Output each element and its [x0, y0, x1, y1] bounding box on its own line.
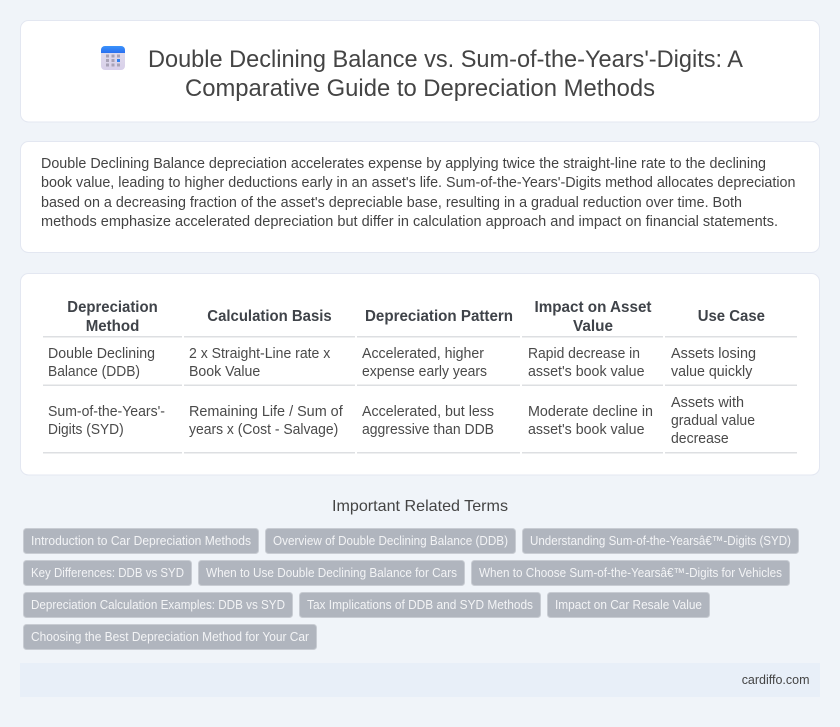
table rules — [43, 337, 797, 453]
table row: DDB — [48, 346, 756, 380]
icon: calendar — [101, 46, 125, 70]
table header: Value — [573, 318, 613, 335]
table header: Impact on Asset — [534, 299, 652, 316]
related term tags: Depreciation Calculation Examples: DDB vs SYD — [31, 598, 285, 612]
table row: DDB: Balance (DDB) — [48, 364, 140, 380]
title: Double Declining Balance vs. Sum-of-the-Years'-Digits: A — [148, 46, 743, 73]
table row: DDB: Assets losing — [671, 346, 756, 362]
table row: DDB: Accelerated, higher — [362, 346, 484, 362]
table header — [67, 299, 765, 335]
table row: DDB: Rapid decrease in — [528, 346, 640, 362]
title: Comparative Guide to Depreciation Methods — [185, 75, 655, 102]
table row: DDB: value quickly — [671, 364, 753, 380]
table row: SYD: years x (Cost - Salvage) — [189, 422, 338, 438]
panel: summary text — [20, 142, 820, 252]
table row: SYD: gradual value — [671, 413, 755, 429]
table row: SYD: Assets with — [671, 395, 744, 411]
related term tags: Understanding Sum-of-the-Yearsâ€™-Digits (SYD) — [530, 534, 791, 548]
table row: DDB: 2 x Straight-Line rate x — [189, 346, 331, 362]
table row: SYD: Accelerated, but less — [362, 404, 494, 420]
related term tags — [24, 528, 798, 650]
table row: SYD: aggressive than DDB — [362, 422, 494, 438]
related term tags: Impact on Car Resale Value — [555, 598, 702, 612]
table header: Depreciation — [67, 299, 158, 316]
table header: Use Case — [698, 308, 765, 325]
table header: Calculation Basis — [207, 308, 332, 325]
related term tags: Overview of Double Declining Balance (DDB) — [273, 534, 508, 548]
text block: summary: book value, leading to higher deductions early in an asset's life. Sum-of-the-Years'-Digits method allocates depreciation — [41, 175, 796, 191]
table row: SYD: Moderate decline in — [528, 404, 653, 420]
related term tags: When to Use Double Declining Balance for Cars — [206, 566, 457, 580]
heading: related terms: Important Related Terms — [332, 498, 508, 515]
related term tags: Tax Implications of DDB and SYD Methods — [307, 598, 533, 612]
related term tags: When to Choose Sum-of-the-Yearsâ€™-Digits for Vehicles — [479, 566, 782, 580]
table row: DDB: Double Declining — [48, 346, 155, 362]
table header: Depreciation Pattern — [365, 308, 513, 325]
table row: SYD: decrease — [671, 431, 729, 447]
table row: SYD: Digits (SYD) — [48, 422, 124, 438]
panel: comparison table — [20, 274, 820, 475]
table row: SYD: asset's book value — [528, 422, 644, 438]
table row: DDB: asset's book value — [528, 364, 644, 380]
table row: DDB: expense early years — [362, 364, 487, 380]
text block: summary: methods emphasize accelerated depreciation but differ in calculation approach and impact on financial statements. — [41, 214, 778, 230]
table row: SYD: Remaining Life / Sum of — [189, 404, 344, 420]
title — [148, 46, 743, 102]
table header: Method — [86, 318, 139, 335]
text block: summary: based on a decreasing fraction of the asset's depreciable base, resulting in a gradual reduction over time. Both — [41, 195, 742, 211]
panel: title header — [20, 20, 820, 122]
related term tags: Choosing the Best Depreciation Method for Your Car — [31, 630, 309, 644]
related term tags: Introduction to Car Depreciation Methods — [31, 534, 251, 548]
text block: summary: Double Declining Balance depreciation accelerates expense by applying twice the straight-line rate to the declining — [41, 156, 766, 172]
text block: summary — [41, 156, 796, 230]
table row: SYD — [48, 395, 755, 447]
table row: SYD: Sum-of-the-Years'- — [48, 404, 165, 420]
related term tags: Key Differences: DDB vs SYD — [31, 566, 184, 580]
footer source: cardiffo.com — [742, 672, 810, 687]
footer — [20, 663, 820, 697]
table row: DDB: Book Value — [189, 364, 260, 380]
